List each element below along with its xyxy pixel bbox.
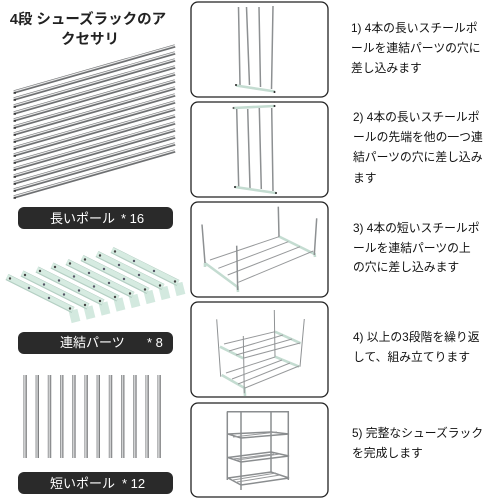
label: long poles: * 16 [121,211,144,226]
text: step 3: の穴に差し込みます [353,260,459,274]
label: long poles [18,207,173,229]
short poles illustration [23,375,161,458]
title [10,10,166,48]
text: step 2 [353,110,483,185]
text: step 5: を完成します [352,446,423,460]
text: step 3 [353,221,480,274]
text: step 1: 1) 4本の長いスチールポ [351,21,478,35]
label: connector parts [18,332,173,354]
text: step 2: ールの先端を他の一つ連 [353,130,483,144]
panel: step 5 [191,403,328,497]
text: step 1: ールを連結パーツの穴に [351,41,481,55]
text: step 1 [351,21,481,75]
label: connector parts: * 8 [147,335,163,350]
title: 4段 シューズラックのア [10,10,166,28]
label: short poles: * 12 [122,476,145,491]
title: クセサリ [61,31,119,48]
text: step 4: して、組み立てります [353,350,470,364]
long poles illustration [14,45,175,198]
text: step 2: ます [353,171,377,185]
text: step 2: 2) 4本の長いスチールポ [353,110,480,124]
panel: step 1 [191,2,328,97]
text: step 3: 3) 4本の短いスチールポ [353,221,480,235]
connector parts illustration [7,250,181,322]
text: step 4 [353,330,480,364]
text: step 1: 差し込みます [351,61,422,75]
panel: step 2 [191,102,328,197]
panel: step 3 [191,202,328,297]
label: connector parts: 連結パーツ [60,335,125,350]
label: long poles: 長いポール [50,211,115,226]
text: step 4: 4) 以上の3段階を繰り返 [353,330,480,344]
label: short poles: 短いポール [50,476,115,491]
text: step 5: 5) 完整なシューズラック [352,426,483,440]
label: short poles [18,472,173,494]
text: step 3: ールを連結パーツの上 [353,241,471,255]
text: step 2: 結パーツの穴に差し込み [353,150,483,164]
text: step 5 [352,426,483,460]
panel: step 4 [191,302,328,397]
